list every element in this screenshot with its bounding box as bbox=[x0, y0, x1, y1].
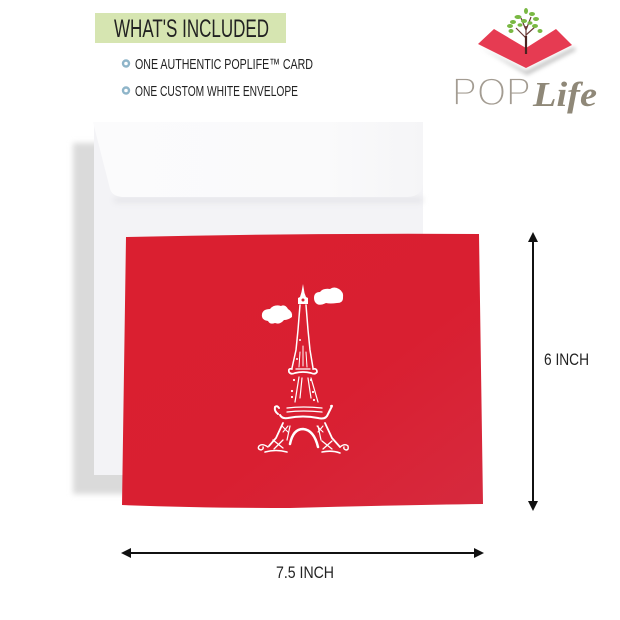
logo tree bbox=[507, 8, 542, 54]
envelope flap bbox=[93, 122, 423, 197]
cross braces bbox=[282, 426, 323, 432]
bullet item: card: ONE AUTHENTIC POPLIFE™ CARD bbox=[135, 56, 313, 73]
cloud right bbox=[314, 288, 343, 305]
bullet item: envelope bbox=[123, 83, 298, 100]
logo shadow bbox=[480, 47, 576, 75]
dimension arrow: width bbox=[121, 548, 484, 558]
lower legs bbox=[269, 423, 340, 447]
logo: PopLife bbox=[452, 8, 597, 114]
envelope shadow bbox=[73, 143, 133, 494]
width label: 7.5 INCH bbox=[276, 563, 334, 582]
heading: what's included: WHAT'S INCLUDED bbox=[114, 15, 269, 43]
dimension arrow: height bbox=[528, 232, 538, 511]
envelope bbox=[93, 122, 423, 475]
tower dots bbox=[291, 339, 315, 401]
bullet item: envelope: ONE CUSTOM WHITE ENVELOPE bbox=[135, 83, 298, 100]
envelope flap shadow bbox=[114, 197, 423, 203]
eiffel tower and clouds bbox=[258, 284, 348, 453]
base curls bbox=[258, 445, 348, 450]
tower lines bbox=[258, 305, 348, 453]
red card bbox=[122, 234, 483, 508]
envelope body bbox=[94, 122, 423, 475]
logo wordmark Life: Life bbox=[532, 75, 597, 114]
upper platform bbox=[289, 369, 317, 374]
tower spire bbox=[298, 284, 308, 304]
logo wordmark POP: POP bbox=[452, 71, 531, 114]
list of included items bbox=[123, 56, 313, 100]
heading: what's included bbox=[95, 13, 286, 43]
logo open-book shape bbox=[478, 29, 572, 68]
arch bbox=[290, 429, 318, 447]
second platform bbox=[275, 406, 332, 418]
bullet item: card bbox=[123, 56, 313, 73]
height label: 6 INCH bbox=[544, 350, 589, 369]
cloud left bbox=[262, 305, 292, 324]
middle legs bbox=[295, 377, 318, 402]
